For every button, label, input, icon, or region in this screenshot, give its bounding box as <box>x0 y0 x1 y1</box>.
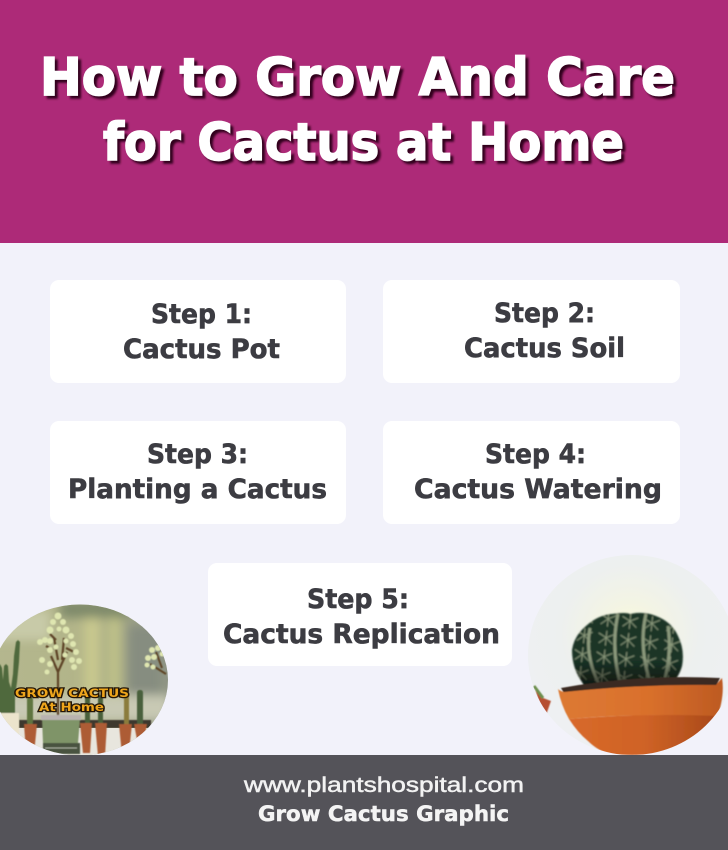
title: for Cactus at Home <box>103 113 624 173</box>
small cacti <box>27 697 33 725</box>
card: step 2: Step 2: <box>494 298 595 329</box>
card: step 4: Step 4: <box>485 439 586 470</box>
green pot <box>42 719 80 743</box>
pot rim inner and soil <box>561 677 720 693</box>
photo: potted cacti on a windowsill <box>0 600 170 760</box>
footer text <box>243 773 524 827</box>
left cactus group <box>0 640 20 722</box>
jade tree <box>46 634 74 718</box>
photo label: grow cactus at home <box>15 686 129 714</box>
photo label: grow cactus at home: At Home <box>39 700 104 714</box>
small pots <box>24 723 147 756</box>
title: How to Grow And Care <box>40 48 675 108</box>
cactus body <box>572 613 683 696</box>
card: step 4 <box>383 421 680 524</box>
small pot corner at left <box>535 690 552 713</box>
title: for Cactus at Home <box>106 116 627 176</box>
card: step 3: Planting a Cactus <box>68 474 327 505</box>
title <box>40 48 678 176</box>
card: step 1: Step 1: <box>151 299 252 330</box>
terracotta pot <box>558 678 723 719</box>
card: step 5 <box>208 563 512 666</box>
card: step 3: Step 3: <box>147 439 248 470</box>
card: step 3 <box>50 421 346 524</box>
right tree <box>150 652 166 674</box>
photo label: grow cactus at home: GROW CACTUS <box>15 686 129 700</box>
footer band <box>0 755 728 850</box>
card: step 4: Cactus Watering <box>414 474 662 505</box>
caption: Grow Cactus Graphic <box>258 802 509 827</box>
card: step 1: Cactus Pot <box>123 334 280 365</box>
card: step 1 <box>50 280 346 383</box>
photo: barrel cactus in terracotta pot <box>525 550 728 760</box>
header band <box>0 0 728 243</box>
title: How to Grow And Care <box>43 51 678 111</box>
card: step 2: Cactus Soil <box>464 333 625 364</box>
card: step 2 <box>383 280 680 383</box>
card: step 5: Cactus Replication <box>223 619 500 650</box>
website: www.plantshospital.com <box>243 773 524 797</box>
window sill <box>19 720 151 728</box>
card: step 5: Step 5: <box>307 584 409 615</box>
